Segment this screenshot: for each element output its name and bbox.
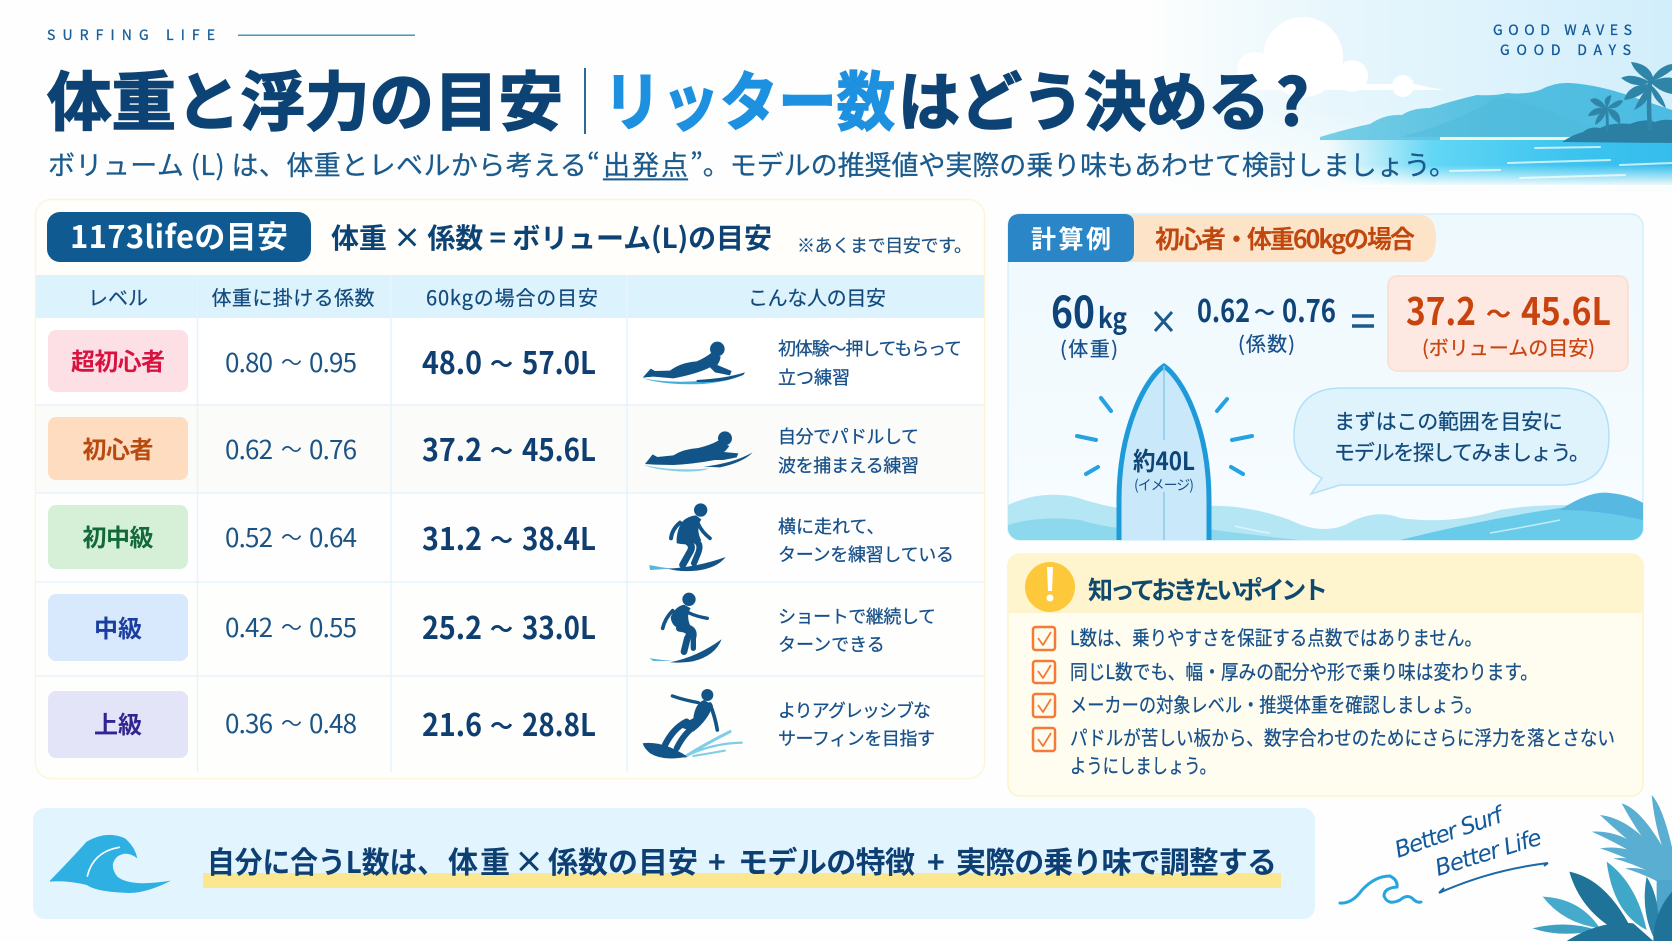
checklist: L数は、乗りやすさを保証する点数ではありません。 [1070, 622, 1482, 651]
summary text: + [708, 838, 726, 882]
panel header [1008, 554, 1643, 613]
row: 初中級: 0.64 [309, 518, 357, 555]
result box: 〜 [1486, 295, 1511, 331]
row: 中級: 33.0L [522, 603, 596, 648]
badge: 1173life: 1173lifeの目安 [70, 212, 288, 257]
tagline: GOOD WAVES GOOD DAYS: GOOD DAYS [1500, 40, 1631, 60]
row: 中級: 0.42 [225, 608, 273, 645]
row: 中級: ターンできる [778, 631, 885, 657]
formula: coefficient: 〜 [1254, 297, 1275, 327]
row: 初中級: 横に走れて、 [778, 513, 885, 539]
formula heading: 体重 × 係数 = ボリューム(L)の目安 [331, 217, 772, 257]
row: 超初心者: 0.95 [309, 343, 357, 380]
icon: prone surfer paddling [643, 342, 745, 384]
row: 上級: 28.8L [522, 700, 596, 745]
row: 超初心者: 48.0 [422, 338, 482, 383]
tab: 計算例 [1008, 214, 1436, 262]
row: 初心者: 45.6L [522, 425, 596, 470]
row: 初心者: 〜 [281, 434, 302, 464]
formula: coefficient: 0.76 [1282, 286, 1336, 331]
subtitle: ”。モデルの推奨値や実際の乗り味もあわせて検討しましょう。 [690, 144, 1456, 183]
row: 初中級: 〜 [490, 521, 513, 555]
title: リッター数 [603, 52, 895, 144]
row: 超初心者: 〜 [490, 345, 513, 379]
icon: prone surfer catching a wave [643, 431, 753, 472]
row: 上級: よりアグレッシブな [778, 697, 931, 723]
row: 中級: 0.55 [309, 608, 357, 645]
row: 初心者: 初心者 [82, 430, 154, 465]
row: 超初心者 [48, 330, 962, 392]
checklist: 同じL数でも、幅・厚みの配分や形で乗り味は変わります。 [1070, 656, 1538, 685]
tab: 計算例: 初心者・体重60kgの場合 [1155, 220, 1415, 256]
row: 中級: 25.2 [422, 603, 482, 648]
row: 上級: 0.48 [309, 704, 357, 741]
row: 初中級: 38.4L [522, 514, 596, 559]
formula: coefficient: (係数) [1238, 328, 1295, 357]
row: 超初心者: 0.80 [225, 343, 273, 380]
icon: surfboard [1119, 366, 1209, 545]
row: 初中級: 〜 [281, 522, 302, 552]
result box: 37.2 [1406, 281, 1476, 336]
tagline: GOOD WAVES GOOD DAYS [1493, 20, 1632, 60]
title: はどう決める [898, 52, 1270, 144]
tab: 計算例: 計算例 [1031, 220, 1111, 256]
brand label: SURFING LIFE: SURFING LIFE [47, 25, 215, 45]
highlight marker [203, 873, 1281, 888]
formula: weight: (体重) [1060, 333, 1118, 362]
row: 中級: ショートで継続して [778, 603, 936, 629]
row: 初心者: 0.62 [225, 430, 273, 467]
subtitle: ボリューム (L) は、体重とレベルから考える“ [48, 144, 600, 183]
result box: (ボリュームの目安) [1422, 332, 1595, 361]
panel: level table [36, 200, 984, 778]
summary text: 体重 [448, 838, 510, 882]
speech bubble: まずはこの範囲を目安に [1334, 406, 1563, 436]
formula: times [1155, 312, 1172, 331]
formula: equals [1352, 316, 1374, 326]
title: ? [1276, 52, 1309, 144]
table header [36, 275, 984, 318]
row: 上級: 〜 [490, 707, 513, 741]
table header: レベル [88, 282, 148, 311]
summary text: 自分に合うL数は、 [207, 838, 445, 882]
checklist [1033, 622, 1615, 779]
note: ※あくまで目安です。 [797, 232, 972, 258]
handwritten slogan: Better Surf [1391, 802, 1509, 864]
icon: surfer riding sideways [649, 503, 726, 571]
formula: weight: 60 [1051, 277, 1095, 341]
summary text: 実際の乗り味で調整する [956, 838, 1277, 882]
icon: exclamation [1025, 562, 1075, 612]
row: 初中級: ターンを練習している [778, 541, 954, 567]
title [47, 52, 1309, 144]
row: 超初心者: 初体験〜押してもらって [778, 335, 962, 361]
icon: surfer turning [649, 593, 722, 663]
formula: coefficient [1197, 286, 1336, 357]
speech bubble: モデルを探してみましょう。 [1334, 437, 1590, 467]
row: 超初心者: 〜 [281, 347, 302, 377]
table header: 60kgの場合の目安 [426, 282, 598, 311]
row: 上級: サーフィンを目指す [778, 725, 935, 751]
speech bubble [1294, 388, 1609, 494]
scenery: beach, mountains and palms [1150, 0, 1672, 195]
row: 上級: 〜 [281, 708, 302, 738]
title: 体重と浮力の目安 [47, 52, 563, 144]
result box [1388, 276, 1628, 371]
panel: bottom summary [33, 808, 1315, 919]
row: 中級 [48, 593, 936, 663]
table header: 体重に掛ける係数 [212, 282, 374, 311]
row: 初心者: 37.2 [422, 425, 482, 470]
handwritten slogan [1391, 802, 1548, 893]
row: 初中級: 初中級 [82, 518, 154, 553]
decoration: tropical leaves [1532, 795, 1672, 941]
checklist: ようにしましょう。 [1070, 750, 1216, 779]
row: 超初心者: 超初心者 [71, 342, 165, 377]
table header: こんな人の目安 [748, 282, 886, 311]
panel header: 知っておきたいポイント [1088, 571, 1328, 607]
row: 上級: 21.6 [422, 700, 482, 745]
row: 上級 [48, 689, 935, 758]
subtitle: 出発点 [603, 144, 688, 183]
row: 上級: 0.36 [225, 704, 273, 741]
tagline: GOOD WAVES GOOD DAYS: GOOD WAVES [1493, 20, 1632, 40]
checklist: パドルが苦しい板から、数字合わせのためにさらに浮力を落とさない [1070, 722, 1615, 751]
row: 初中級: 31.2 [422, 514, 482, 559]
row: 超初心者: 57.0L [522, 338, 596, 383]
summary text: × [514, 838, 544, 882]
row: 中級: 〜 [281, 612, 302, 642]
formula: weight: kg [1098, 297, 1127, 337]
summary text: 係数の目安 [548, 838, 698, 882]
row: 中級: 中級 [94, 609, 142, 644]
checklist: メーカーの対象レベル・推奨体重を確認しましょう。 [1070, 689, 1482, 718]
icon: advanced surfer carving [643, 689, 742, 758]
row: 超初心者: 立つ練習 [778, 364, 850, 390]
summary text [207, 838, 1277, 882]
result box: 45.6L [1521, 281, 1611, 336]
summary text: + [927, 838, 945, 882]
row: 初中級: 0.52 [225, 518, 273, 555]
handwritten slogan: Better Life [1432, 825, 1545, 882]
icon: surfboard: (イメージ) [1134, 475, 1194, 495]
subtitle [48, 144, 1456, 183]
icon: emphasis rays [1077, 398, 1252, 474]
formula: coefficient: 0.62 [1197, 286, 1250, 331]
summary text: モデルの特徴 [738, 838, 915, 882]
row: 初心者 [48, 417, 919, 480]
panel: calculation example [1008, 214, 1643, 545]
row: 初心者: 波を捕まえる練習 [778, 452, 919, 478]
formula: weight [1051, 277, 1127, 362]
icon: surfboard: 約40L [1133, 442, 1195, 478]
row: 初心者: 0.76 [309, 430, 357, 467]
row: 初心者: 自分でパドルして [778, 423, 919, 449]
row: 上級: 上級 [94, 705, 142, 740]
row: 中級: 〜 [490, 610, 513, 644]
icon: wave [50, 835, 171, 893]
row: 初心者: 〜 [490, 432, 513, 466]
icon: hand-drawn wave [1340, 876, 1421, 903]
panel: key points [1008, 554, 1643, 796]
waves [1008, 493, 1643, 540]
row: 初中級 [48, 503, 954, 571]
